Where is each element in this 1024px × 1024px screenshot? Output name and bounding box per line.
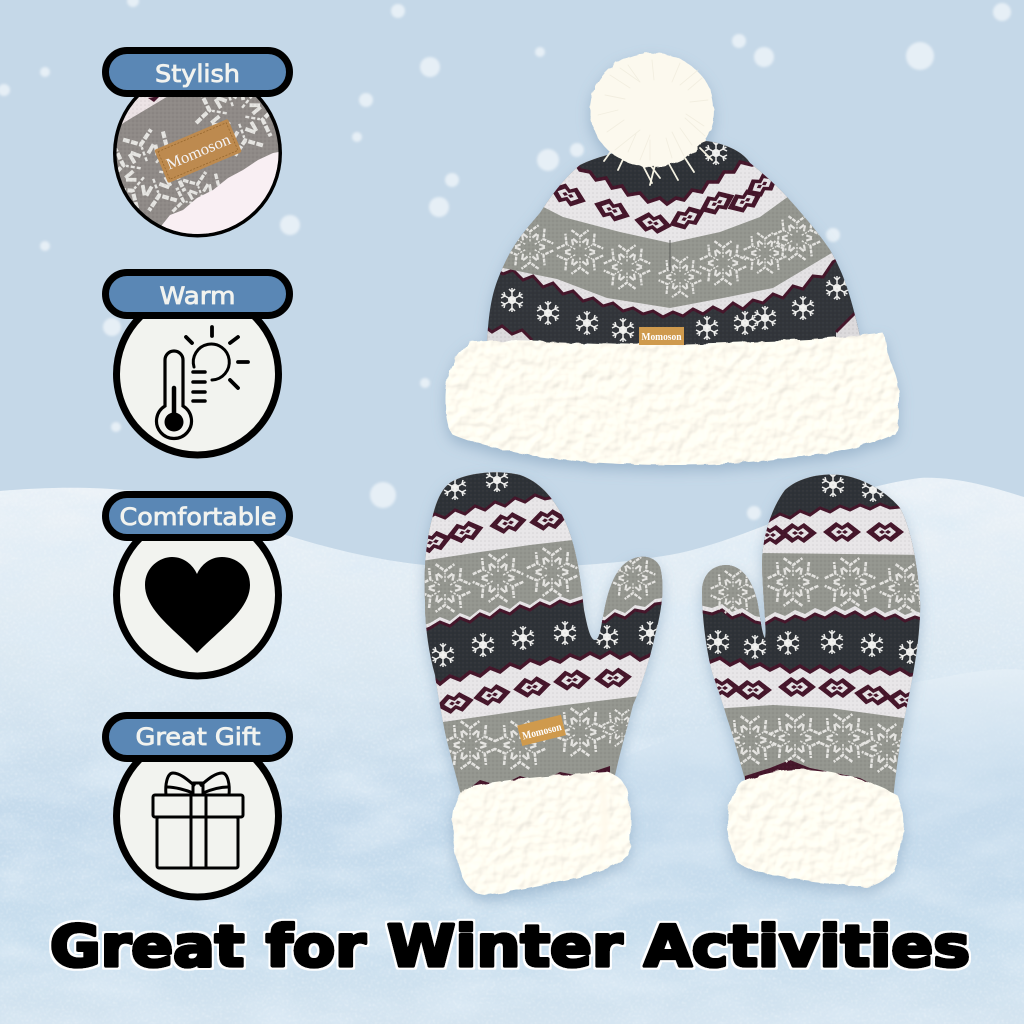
product: left mitten (412, 465, 670, 895)
product: beanie hat (445, 53, 899, 465)
badge: Comfortable (106, 494, 290, 676)
hat brand label (639, 327, 684, 345)
badge: Great Gift (106, 716, 290, 897)
badge: Stylish (99, 50, 290, 245)
left mitten brand label: Momoson (521, 721, 563, 742)
snowflakes over ground (370, 482, 761, 520)
label: Momoson tag: Momoson (164, 131, 233, 173)
hat small snowflakes (501, 141, 848, 342)
icon: heart (145, 557, 250, 653)
hat pom-pom (590, 53, 714, 185)
pill heading: Comfortable: Comfortable (120, 503, 276, 531)
left mitten sherpa cuff (452, 772, 631, 895)
falling snowflakes (0, 0, 1011, 432)
left mitten knit body (412, 465, 670, 810)
hat brand label: Momoson (642, 331, 682, 343)
pill heading: Comfortable (106, 494, 290, 538)
left mitten small snowflakes (432, 468, 661, 667)
icon: gift box (153, 773, 243, 868)
icon: thermometer and sun (157, 327, 248, 439)
hat large snowflakes (507, 216, 820, 297)
right mitten sherpa cuff (728, 770, 903, 887)
snow ground (0, 478, 1024, 1024)
badge circle (116, 735, 278, 897)
left mitten brand label (517, 715, 566, 746)
right mitten knit body (695, 465, 930, 810)
pill heading: Stylish: Stylish (155, 60, 240, 88)
hat knit body (482, 141, 863, 345)
pill heading: Stylish (106, 50, 290, 94)
badge circle (116, 514, 278, 676)
product: right mitten (695, 465, 930, 887)
left mitten large snowflakes (420, 548, 655, 769)
left mitten diamonds (412, 507, 633, 716)
hat diamond motifs (554, 173, 775, 234)
pill heading: Warm: Warm (160, 282, 236, 310)
pill heading: Great Gift: Great Gift (136, 723, 260, 751)
title: Great for Winter Activities (50, 914, 970, 980)
hat sherpa cuff (445, 333, 899, 465)
label: Momoson tag (154, 119, 242, 183)
right mitten small snowflakes (707, 473, 921, 664)
badge photo circle: knit close-up (113, 97, 282, 238)
pill heading: Warm (106, 272, 290, 316)
right mitten large snowflakes (711, 558, 930, 772)
badge circle (116, 293, 278, 455)
pill heading: Great Gift (106, 716, 290, 758)
badge: Warm (106, 272, 290, 455)
right mitten diamonds (714, 522, 910, 710)
